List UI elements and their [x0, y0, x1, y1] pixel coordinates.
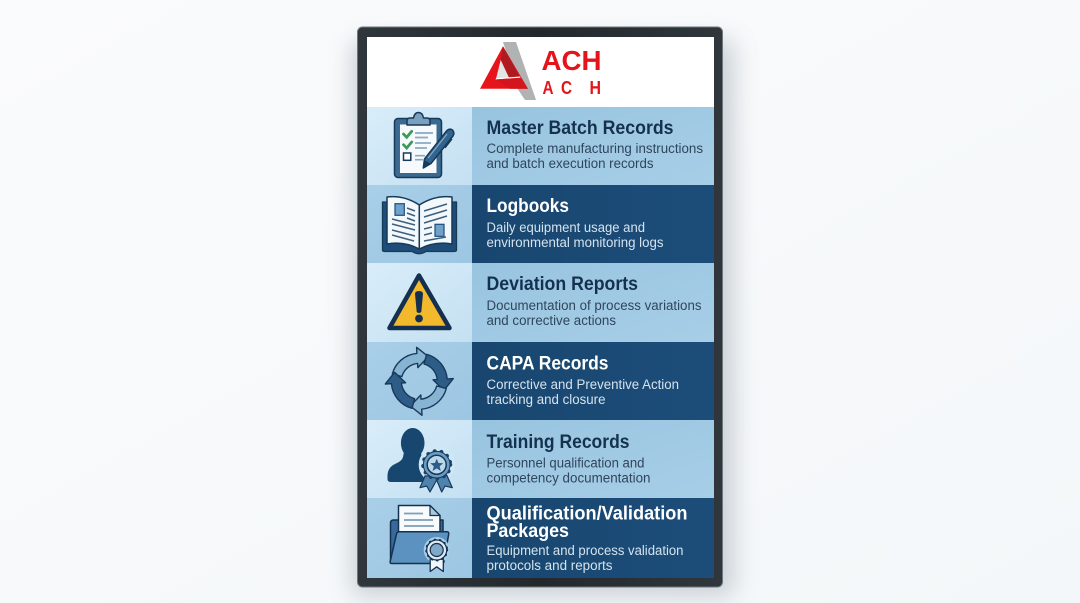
description: [486, 456, 650, 486]
description: [486, 220, 664, 250]
heading: [486, 504, 688, 542]
panel: logo header: [367, 37, 714, 107]
heading: Packages: [486, 521, 569, 542]
description: [486, 543, 684, 573]
logo wordmark: H: [590, 78, 601, 98]
heading: Master Batch Records: [486, 118, 674, 139]
icon: warning triangle: [390, 276, 450, 328]
icon: person with award: [388, 428, 455, 492]
description: competency documentation: [486, 470, 650, 486]
display frame: [358, 27, 722, 587]
description: and batch execution records: [486, 156, 654, 171]
panel: capa records: [367, 342, 714, 420]
logo wordmark: C: [561, 78, 572, 98]
description: [486, 298, 702, 328]
description: tracking and closure: [486, 392, 606, 407]
panel: logbooks: [367, 185, 714, 263]
panel: master batch records: [367, 107, 714, 185]
description: and corrective actions: [486, 313, 616, 328]
heading: Training Records: [486, 432, 630, 453]
description: Daily equipment usage and: [486, 220, 645, 235]
icon: clipboard and pen: [394, 112, 454, 178]
panel: display: [358, 27, 722, 587]
description: [486, 377, 679, 407]
panel: qualification validation packages: [367, 498, 714, 578]
logo mark: [480, 42, 536, 100]
display shadow: [352, 40, 734, 596]
heading: Logbooks: [486, 196, 569, 217]
logo wordmark: A: [542, 78, 554, 98]
description: Documentation of process variations: [486, 298, 702, 313]
description: protocols and reports: [486, 558, 613, 573]
icon: open book: [382, 197, 456, 254]
heading: Qualification/Validation: [486, 504, 688, 524]
description: Corrective and Preventive Action: [486, 377, 679, 392]
icon: folder with certificate: [390, 506, 450, 572]
description: [486, 141, 703, 171]
icon: cycle arrows: [385, 347, 453, 415]
heading: Deviation Reports: [486, 274, 638, 295]
panel: deviation reports: [367, 263, 714, 342]
description: Equipment and process validation: [486, 543, 684, 558]
logo wordmark: ACH: [542, 45, 602, 76]
description: environmental monitoring logs: [486, 235, 664, 250]
heading: CAPA Records: [486, 354, 608, 374]
panel: training records: [367, 420, 714, 498]
logo wordmark: [542, 45, 602, 98]
description: Personnel qualification and: [486, 456, 644, 470]
description: Complete manufacturing instructions: [486, 141, 703, 156]
